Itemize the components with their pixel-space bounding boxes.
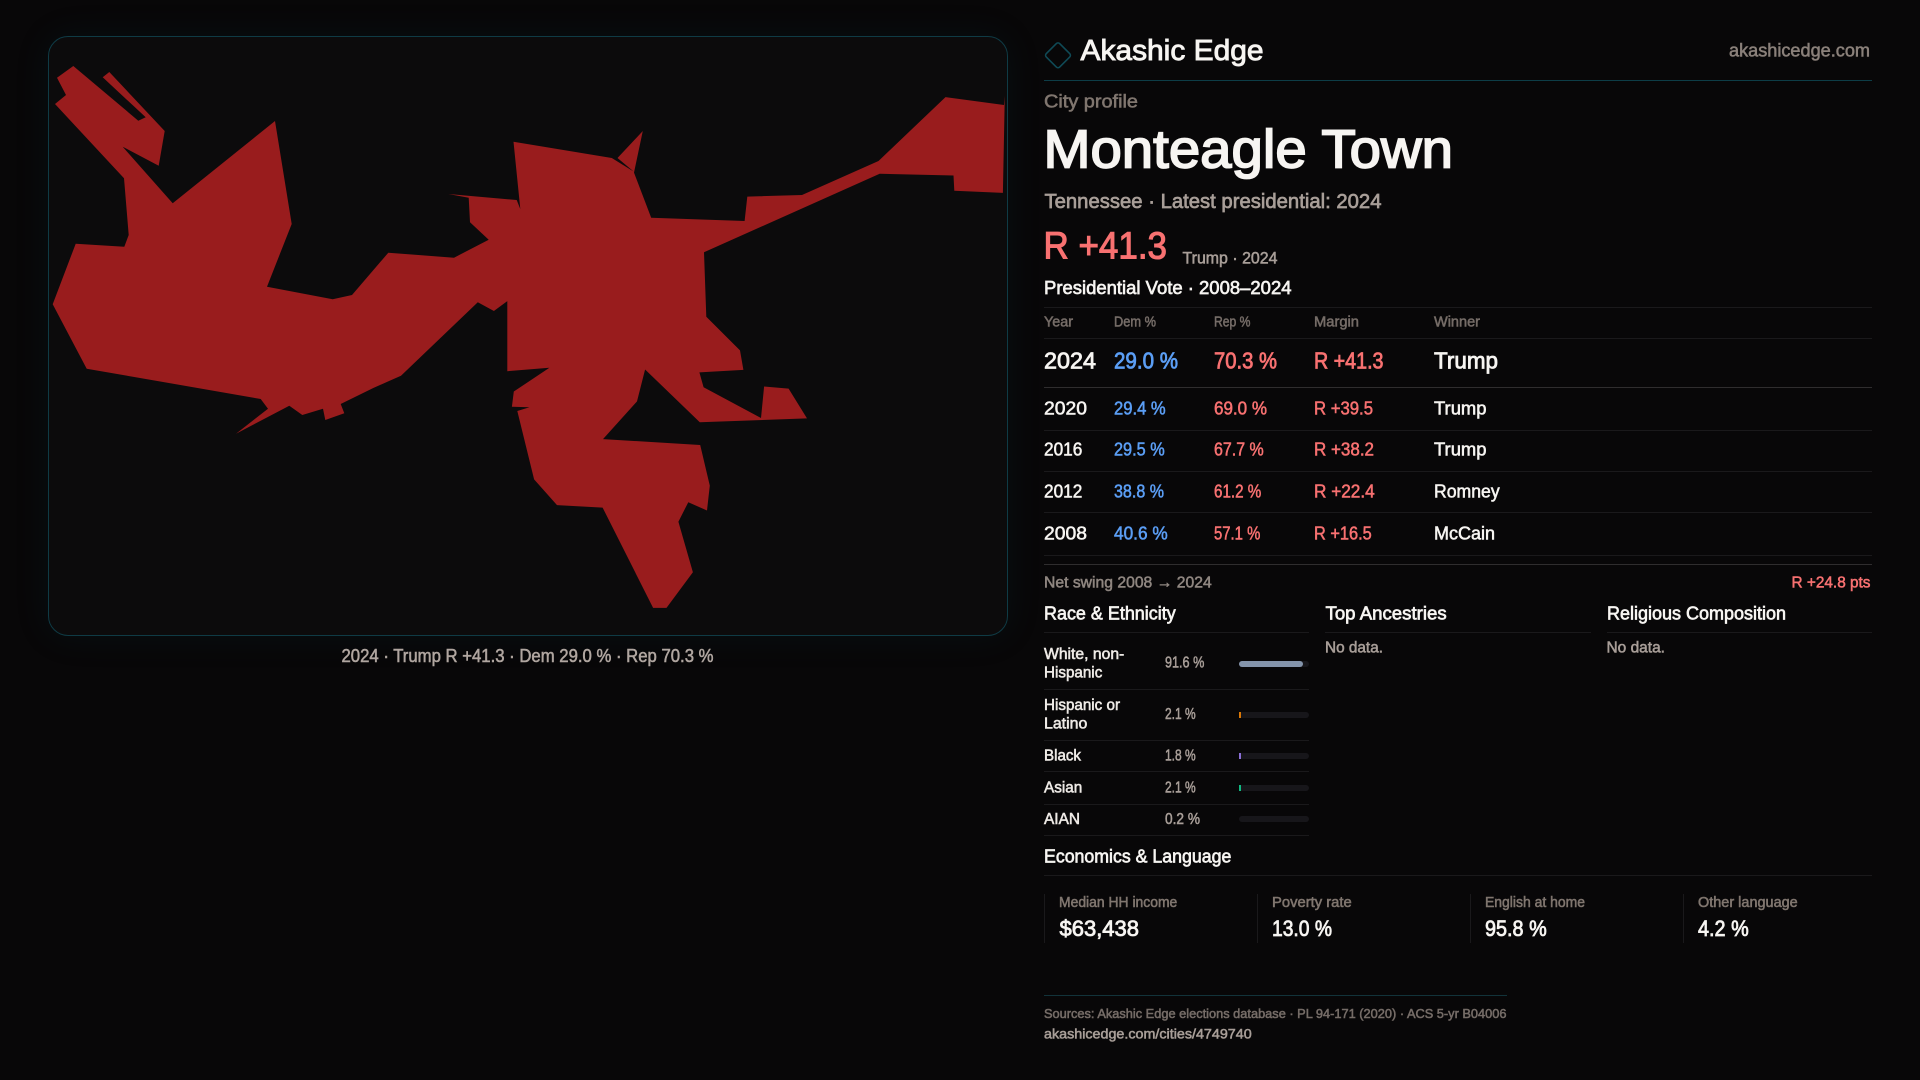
row 2020: 69.0 % (1214, 399, 1267, 419)
row 2012 (1044, 481, 1500, 501)
row 2024: R +41.3 (1314, 348, 1384, 374)
presidential vote table (1044, 308, 1872, 564)
stat: English at home: 95.8 % (1485, 916, 1547, 941)
headline margin: Trump · 2024 (1182, 250, 1278, 268)
row: White, non-Hispanic: 91.6 % (1165, 655, 1204, 672)
net swing (1044, 574, 1870, 592)
stat: English at home: English at home (1485, 895, 1585, 911)
row 2016: 67.7 % (1214, 440, 1264, 460)
row: Asian: 2.1 % (1165, 780, 1196, 797)
row: Black: Black (1044, 748, 1081, 765)
stat: poverty rate: 13.0 % (1272, 916, 1332, 941)
sources: Sources: Akashic Edge elections database · PL 94-171 (2020) · ACS 5-yr B04006 (1044, 1006, 1506, 1021)
city url: akashicedge.com/cities/4749740 (1044, 1026, 1252, 1042)
row 2020: 2020 (1044, 399, 1087, 419)
map caption: 2024 · Trump R +41.3 · Dem 29.0 % · Rep 70.3 % (342, 646, 714, 666)
table header: Year (1044, 315, 1073, 331)
brand name: Akashic Edge (1080, 35, 1264, 67)
row: White, non-Hispanic (1044, 646, 1309, 682)
stat: other language: Other language (1698, 895, 1798, 911)
stat: English at home (1470, 894, 1585, 943)
row: Hispanic or Latino (1044, 697, 1309, 733)
panel: religious composition: No data. (1606, 640, 1665, 657)
row 2020: R +39.5 (1314, 399, 1373, 419)
row: Hispanic or Latino: 2.1 % (1165, 706, 1196, 723)
row 2024: Trump (1434, 348, 1498, 374)
brand url: akashicedge.com (1729, 41, 1870, 61)
table header: Rep % (1214, 315, 1251, 331)
headline margin: R +41.3 (1044, 226, 1167, 268)
row: AIAN: 0.2 % (1165, 811, 1200, 828)
row 2024 (1044, 348, 1498, 374)
row 2020 (1044, 399, 1486, 419)
stat: other language: 4.2 % (1698, 916, 1749, 941)
panel: economics and language (1044, 847, 1872, 943)
row 2008: R +16.5 (1314, 524, 1372, 544)
row 2016: 2016 (1044, 440, 1082, 460)
panel: top ancestries (1325, 604, 1591, 657)
row 2024: 70.3 % (1214, 348, 1277, 374)
table header: Margin (1314, 315, 1359, 331)
row 2008: 57.1 % (1214, 524, 1260, 544)
row: Hispanic or Latino: Hispanic or (1044, 697, 1120, 714)
stat: poverty rate (1258, 894, 1352, 943)
table header: Dem % (1114, 315, 1156, 331)
row 2020: 29.4 % (1114, 399, 1166, 419)
stat: median household income: Median HH income (1059, 895, 1177, 911)
row 2016 (1044, 440, 1486, 460)
panel: top ancestries: Top Ancestries (1326, 604, 1447, 624)
table header (1044, 315, 1480, 331)
row 2008: 40.6 % (1114, 524, 1168, 544)
row 2008: 2008 (1044, 524, 1087, 544)
stat: median household income (1044, 894, 1177, 943)
heading: economics and language: Economics & Language (1044, 847, 1231, 867)
header brand (1045, 35, 1870, 69)
row 2008 (1044, 524, 1495, 544)
row 2024: 29.0 % (1114, 348, 1178, 374)
footer (1044, 996, 1507, 1042)
row 2020: Trump (1434, 399, 1486, 419)
table header: Winner (1434, 315, 1480, 331)
row: Hispanic or Latino: Latino (1044, 716, 1087, 733)
panel: religious composition (1606, 604, 1872, 657)
row 2012: 38.8 % (1114, 481, 1164, 501)
row 2016: R +38.2 (1314, 440, 1374, 460)
icon: logo diamond (1045, 42, 1071, 69)
stat: median household income: $63,438 (1060, 916, 1139, 941)
title: Monteagle Town (1044, 120, 1453, 180)
stat: other language (1684, 894, 1798, 943)
eyebrow: City profile (1044, 90, 1138, 111)
row 2012: Romney (1434, 481, 1500, 501)
panel: top ancestries: No data. (1325, 640, 1383, 657)
stat: poverty rate: Poverty rate (1272, 895, 1352, 911)
panel: race and ethnicity (1044, 604, 1309, 836)
row: White, non-Hispanic: White, non- (1044, 646, 1124, 663)
heading: race and ethnicity: Race & Ethnicity (1044, 604, 1176, 624)
panel: religious composition: Religious Composition (1607, 604, 1786, 624)
row 2008: McCain (1434, 524, 1495, 544)
headline margin (1044, 226, 1278, 268)
row: Black: 1.8 % (1165, 748, 1196, 765)
row 2012: R +22.4 (1314, 481, 1375, 501)
row: AIAN (1044, 811, 1309, 828)
presidential vote heading: Presidential Vote · 2008–2024 (1044, 278, 1292, 298)
row 2016: 29.5 % (1114, 440, 1165, 460)
row 2024: 2024 (1044, 348, 1096, 374)
row: AIAN: AIAN (1044, 811, 1080, 828)
row: Asian (1044, 780, 1309, 797)
row 2012: 2012 (1044, 481, 1082, 501)
row: Asian: Asian (1044, 780, 1082, 797)
map frame (48, 36, 1008, 636)
row: Black (1044, 748, 1309, 765)
net swing: R +24.8 pts (1792, 575, 1870, 592)
row 2016: Trump (1434, 440, 1486, 460)
map: Monteagle Town boundary (53, 66, 1005, 608)
net swing: Net swing 2008 → 2024 (1044, 574, 1212, 591)
subtitle: Tennessee · Latest presidential: 2024 (1044, 190, 1382, 213)
row: White, non-Hispanic: Hispanic (1044, 665, 1103, 682)
row 2012: 61.2 % (1214, 481, 1261, 501)
